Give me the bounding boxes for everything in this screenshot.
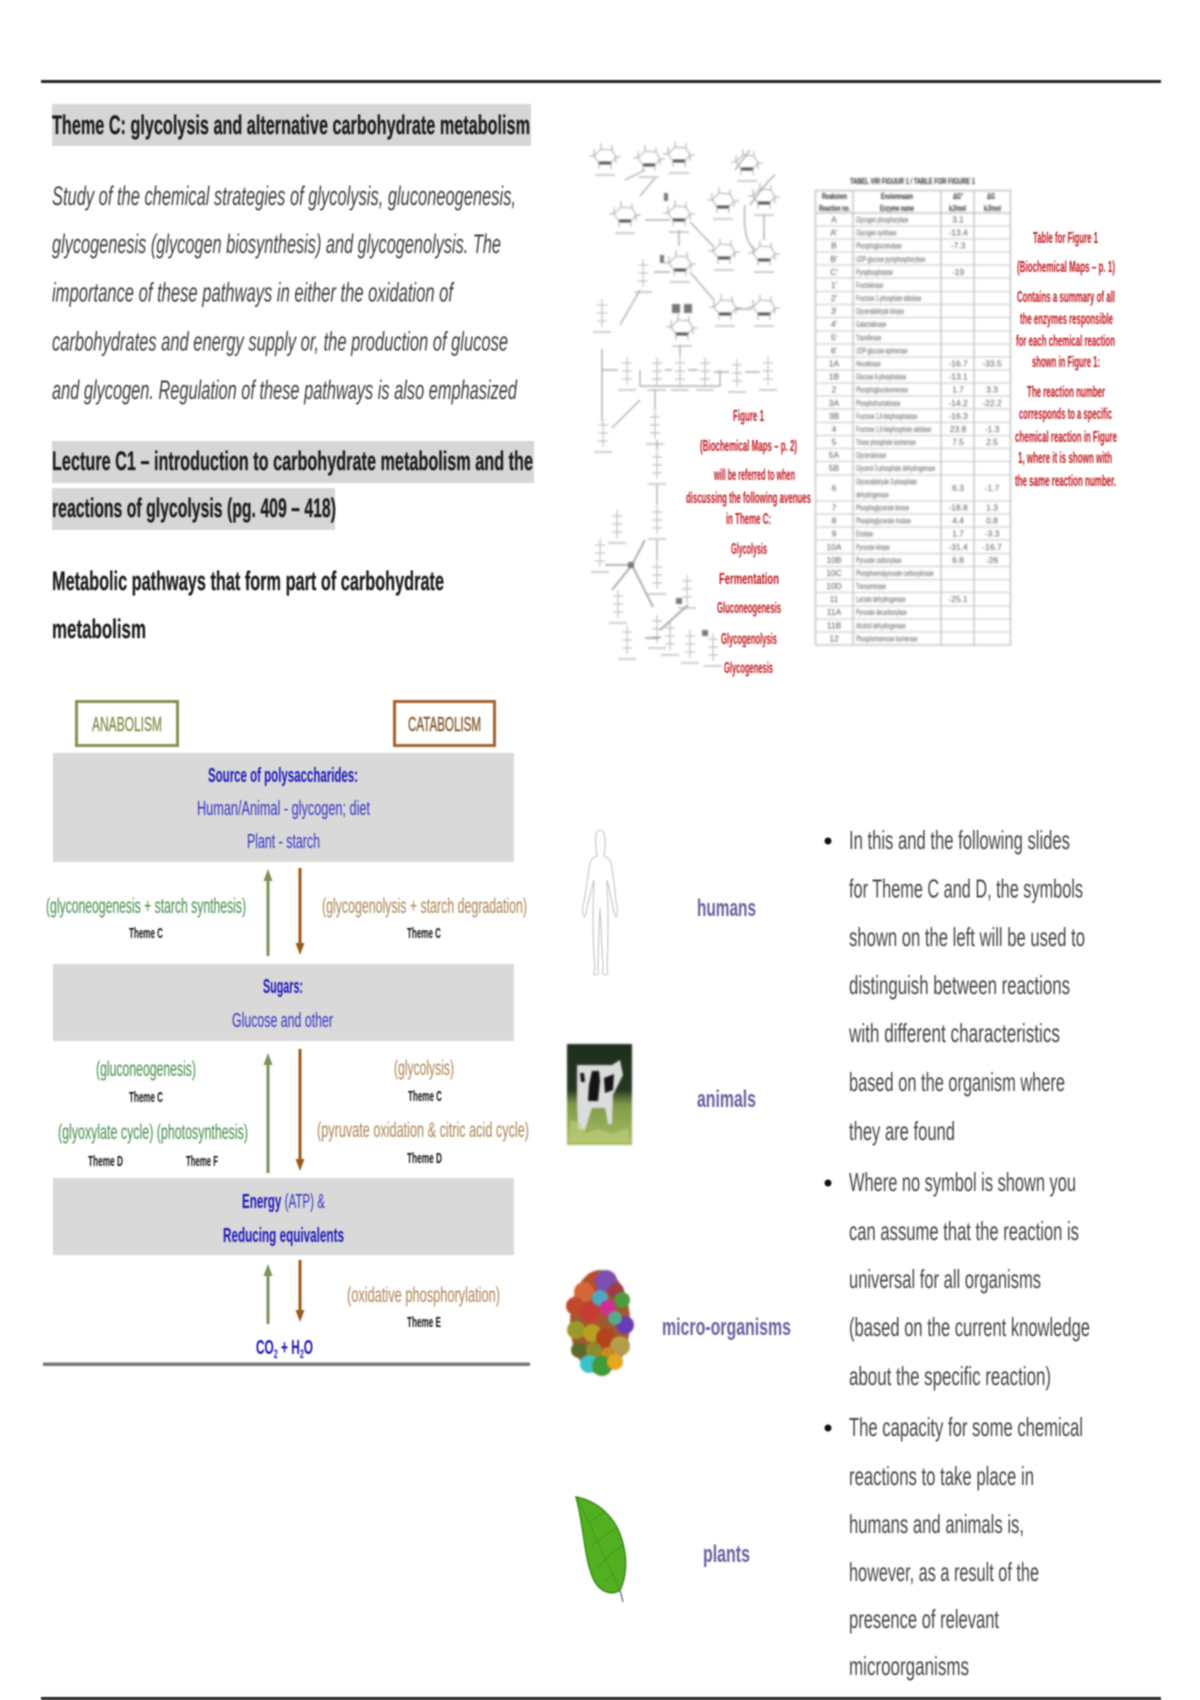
label: glyconeogenesis: Theme C (129, 925, 163, 942)
panel: energy: Energy (ATP) & (242, 1191, 325, 1213)
table energy values: 2.5 (986, 437, 998, 447)
table energy values: 0.8 (986, 516, 998, 526)
table header: ΔG (987, 192, 995, 201)
label: pyruvate oxidation: (pyruvate oxidation & citric acid cycle) (317, 1119, 529, 1142)
callout: figure 1 note: discussing the following avenues (686, 490, 811, 507)
table energy values: -19 (952, 267, 964, 277)
callout: table note: Table for Figure 1 (1033, 230, 1098, 247)
table enzyme names: UDP-glucose epimerase (856, 347, 908, 356)
table energy values: 6.8 (952, 555, 964, 565)
text block: theme description: importance of these pathways in either the oxidation of (52, 278, 455, 308)
label: glycolysis (394, 1057, 454, 1105)
table reaction numbers: 5' (831, 332, 838, 342)
table: enzymes for figure 1: TABEL VIR FIGUUR 1 / TABLE FOR FIGURE 1 (850, 177, 975, 186)
heading: Lecture C1: reactions of glycolysis (pg. 409 – 418) (52, 493, 336, 523)
label: glycolysis: Theme C (408, 1088, 442, 1105)
icon: micro-organisms (566, 1270, 634, 1376)
table enzyme names: Lactate dehydrogenase (856, 596, 906, 605)
table header: Ensiemnaam (881, 192, 913, 201)
table reaction numbers: 2 (832, 385, 837, 395)
table energy values: -1.3 (985, 424, 1000, 434)
label: glycogenolysis (322, 895, 527, 942)
panel: sugars (53, 964, 514, 1041)
figure: metabolic map (589, 141, 780, 666)
arrow: catabolic down 2 (296, 1049, 304, 1171)
table energy values: -13.4 (948, 228, 968, 238)
table energy values: -14.2 (948, 398, 968, 408)
table enzyme names: Pyrophosphatase (856, 269, 893, 277)
table header: kJ/mol (949, 204, 966, 213)
table reaction numbers: A' (830, 228, 838, 238)
table enzyme names: Enolase (856, 531, 873, 539)
callout: figure 1 note: Figure 1 (733, 408, 764, 425)
table reaction numbers: 1B (829, 372, 840, 382)
table reaction numbers: 3B (829, 411, 840, 421)
table reaction numbers: 11A (827, 607, 842, 617)
arrow: anabolic up 1 (264, 869, 272, 956)
table enzyme names: Pyruvate kinase (856, 544, 890, 552)
label: catabolism (394, 702, 494, 746)
table reaction numbers: 6' (831, 345, 838, 355)
heading: metabolic pathways: metabolism (52, 614, 146, 644)
callout: figure 1 note (686, 408, 811, 677)
bullet 2 (824, 1167, 1090, 1391)
table energy values: -16.3 (948, 411, 968, 421)
arrow: anabolic up 3 (264, 1264, 272, 1324)
callout: table note: The reaction number (1027, 384, 1105, 401)
bottom rule (41, 1697, 1161, 1700)
label: oxidative phosphorylation (347, 1284, 500, 1331)
table reaction numbers: 5B (829, 463, 840, 473)
text block: theme description: glycogenesis (glycogen biosynthesis) and glycogenolysis. The (52, 229, 501, 259)
rule under diagram (43, 1362, 530, 1366)
table reaction numbers: 5A (829, 450, 840, 460)
table reaction numbers: 6 (832, 483, 837, 493)
table energy values: 6.3 (952, 483, 964, 493)
heading: metabolic pathways: Metabolic pathways that form part of carbohydrate (52, 566, 444, 596)
callout: figure 1 note: in Theme C: (726, 511, 771, 528)
table reaction numbers: 12 (829, 633, 839, 643)
table energy values: -26 (986, 555, 998, 565)
label: end products: + H (278, 1337, 300, 1359)
table reaction numbers: 9 (832, 529, 837, 539)
label: glyoxylate and photosynthesis: (glyoxylate cycle) (photosynthesis) (58, 1121, 248, 1144)
label: gluconeogenesis: (gluconeogenesis) (96, 1058, 196, 1081)
bullet 1: In this and the following slides (849, 825, 1070, 855)
table reaction numbers: 3' (831, 306, 838, 316)
label: humans: humans (697, 895, 756, 922)
label: glyoxylate and photosynthesis: Theme F (186, 1153, 218, 1170)
text block: theme description: Study of the chemical strategies of glycolysis, gluconeogenesis, (52, 181, 516, 211)
label: glycogenolysis: Theme C (407, 925, 441, 942)
table enzyme names (856, 216, 935, 644)
heading: Lecture C1 (52, 441, 534, 530)
panel: polysaccharides: Source of polysaccharides: (208, 765, 358, 787)
table energy values: -18.8 (948, 502, 968, 512)
table reaction numbers: 10B (826, 555, 842, 565)
table energy values: -7.3 (951, 241, 966, 251)
text block: theme description: and glycogen. Regulation of these pathways is also emphasized (52, 375, 518, 405)
label: catabolism: CATABOLISM (408, 714, 481, 736)
label: glycogenolysis: (glycogenolysis + starch degradation) (322, 895, 527, 918)
table enzyme names: Glycogen synthase (856, 229, 897, 238)
bullet 2: Where no symbol is shown you (849, 1167, 1076, 1197)
label: end products: 2 (300, 1347, 304, 1361)
bullet 3: presence of relevant (849, 1604, 999, 1634)
table enzyme names: Phosphoglucomutase (856, 243, 902, 251)
table reaction numbers: B' (830, 254, 838, 264)
table energy values: -3.3 (985, 529, 1000, 539)
table reaction numbers: 11B (827, 620, 842, 630)
table reaction numbers (826, 214, 842, 643)
table reaction numbers: 2' (831, 293, 838, 303)
table enzyme names: Fructose 1-phosphate aldolase (856, 295, 921, 303)
panel: energy (53, 1178, 514, 1255)
table enzyme names: Phosphoglucoisomerase (856, 387, 908, 395)
icon: human outline (583, 830, 617, 975)
bullet 1 (824, 825, 1085, 1146)
bullet 1: based on the organism where (849, 1067, 1065, 1097)
table header: Reaction no. (819, 204, 850, 213)
table header: kJ/mol (984, 204, 1001, 213)
table enzyme names: Transaminase (856, 583, 886, 591)
panel: energy: Reducing equivalents (223, 1225, 344, 1247)
table energy values: -16.7 (948, 358, 968, 368)
label: glyconeogenesis (46, 895, 246, 942)
table enzyme names: Pyruvate carboxylase (856, 557, 902, 565)
bullet 1: they are found (849, 1116, 955, 1146)
label: gluconeogenesis (96, 1058, 196, 1106)
label: anabolism (76, 702, 178, 746)
label: glycolysis: (glycolysis) (394, 1057, 454, 1080)
table energy values: 23.8 (950, 424, 967, 434)
panel: polysaccharides: Human/Animal - glycogen; diet (197, 798, 370, 820)
callout: figure 1 note: (Biochemical Maps – p. 2) (700, 438, 797, 455)
table reaction numbers: 11 (830, 594, 839, 604)
table enzyme names: Pyruvate decarboxylase (856, 609, 907, 618)
label: oxidative phosphorylation: Theme E (407, 1314, 441, 1331)
table reaction numbers: 4' (831, 319, 838, 329)
label: oxidative phosphorylation: (oxidative phosphorylation) (347, 1284, 500, 1307)
table enzyme names: Alcohol dehydrogenase (856, 622, 906, 631)
table: enzymes for figure 1 (815, 177, 1011, 645)
panel: polysaccharides: Plant - starch (247, 831, 320, 853)
bullet 2: can assume that the reaction is (849, 1216, 1079, 1246)
arrow: catabolic down 3 (296, 1260, 304, 1322)
table energy values: 3.1 (952, 214, 964, 224)
bullet 3: microorganisms (849, 1651, 969, 1681)
label: gluconeogenesis: Theme C (129, 1089, 163, 1106)
table enzyme names: Phosphofructokinase (856, 400, 900, 408)
title: Theme C heading: Theme C: glycolysis and alternative carbohydrate metabolism (52, 110, 530, 140)
label: pyruvate oxidation: Theme D (407, 1150, 442, 1167)
table enzyme names: Glycerol 3-phosphate dehydrogenase (856, 465, 935, 474)
table reaction numbers: 7 (832, 502, 837, 512)
label: glyconeogenesis: (glyconeogenesis + starch synthesis) (46, 895, 246, 918)
table enzyme names: Phosphoglycerate mutase (856, 517, 911, 526)
table enzyme names: Glyceraldehyde 3-phosphate (856, 478, 917, 487)
table reaction numbers: 10A (826, 542, 842, 552)
label: glyoxylate and photosynthesis (58, 1121, 248, 1170)
top rule (41, 80, 1161, 83)
heading: metabolic pathways (52, 566, 444, 644)
table enzyme names: Hexokinase (856, 360, 881, 369)
table reaction numbers: B (831, 241, 837, 251)
diagram: carbohydrate metabolism overview (43, 702, 530, 1366)
callout: table note: 1, where it is shown with (1018, 450, 1112, 467)
table enzyme names: Galactokinase (856, 321, 886, 330)
label: anabolism: ANABOLISM (92, 714, 162, 736)
label: end products: 2 (274, 1347, 278, 1361)
table enzyme names: Fructose 1,6-bisphosphatase (856, 413, 917, 421)
table energy values: -13.1 (948, 372, 968, 382)
table header: ΔG° (953, 192, 963, 201)
table reaction numbers: 8 (832, 516, 837, 526)
table enzyme names: UDP-glucose pyrophosphorylase (856, 256, 926, 264)
label: end products: CO (256, 1337, 286, 1359)
callout: figure 1 note: Glycolysis (731, 541, 767, 558)
heading: Lecture C1: Lecture C1 – introduction to carbohydrate metabolism and the (52, 446, 533, 476)
table energy values: 1.7 (952, 385, 964, 395)
panel: polysaccharides (53, 753, 514, 862)
panel: sugars: Sugars: (263, 976, 303, 998)
table enzyme names: Glyceraldehyde kinase (856, 308, 904, 317)
table enzyme names: Phosphoenolpyruvate carboxykinase (856, 570, 934, 578)
bullet 2: about the specific reaction) (849, 1361, 1051, 1391)
panel: sugars: Glucose and other (232, 1010, 333, 1032)
table energy values: 7.5 (952, 437, 964, 447)
bullet 1: distinguish between reactions (849, 970, 1070, 1000)
arrow: anabolic up 2 (264, 1053, 272, 1173)
table enzyme names: Triose phosphate isomerase (856, 439, 916, 447)
callout: figure 1 note: Fermentation (719, 571, 779, 588)
title: Theme C heading (52, 104, 531, 146)
label: animals: animals (697, 1086, 756, 1113)
callout: figure 1 note: will be referred to when (714, 467, 795, 484)
table energy values: -25.1 (948, 594, 968, 604)
icon: cow photo (567, 1044, 632, 1145)
table reaction numbers: 3A (829, 398, 840, 408)
table reaction numbers: 10D (826, 581, 842, 591)
table enzyme names: Fructokinase (856, 282, 883, 290)
table enzyme names: Phosphoglycerate kinase (856, 504, 909, 513)
table reaction numbers: 4 (832, 424, 837, 434)
icon: leaf (576, 1497, 626, 1602)
table energy values: -22.2 (982, 398, 1002, 408)
bullet 3: however, as a result of the (849, 1557, 1039, 1587)
table header: Enzyme name (880, 204, 914, 213)
table reaction numbers: 10C (826, 568, 842, 578)
label: plants: plants (703, 1541, 750, 1568)
bullet 2: universal for all organisms (849, 1264, 1041, 1294)
bullet 3 (824, 1412, 1083, 1681)
label: micro-organisms: micro-organisms (662, 1314, 791, 1341)
table enzyme names: Glucose 6-phosphatase (856, 373, 906, 382)
arrow: catabolic down 1 (296, 868, 304, 955)
text block: theme description (52, 181, 518, 405)
table energy values: 4.4 (952, 516, 964, 526)
table energy values: -33.5 (982, 358, 1002, 368)
table energy values: -1.7 (985, 483, 1000, 493)
table enzyme names: Glycerokinase (856, 452, 886, 461)
label: glyoxylate and photosynthesis: Theme D (88, 1153, 123, 1170)
table enzyme names: Phosphomannose isomerase (856, 635, 918, 644)
table enzyme names: Glycogen phosphorylase (856, 216, 908, 225)
table energy values: 1.7 (952, 529, 964, 539)
label: pyruvate oxidation (317, 1119, 529, 1167)
table reaction numbers: A (831, 214, 837, 224)
callout: figure 1 note: Glycogenolysis (721, 631, 777, 648)
table reaction numbers: 5 (832, 437, 837, 447)
table reaction numbers: C' (830, 267, 838, 277)
table header (819, 192, 1001, 213)
table energy values (948, 214, 1002, 604)
table reaction numbers: 1' (831, 280, 838, 290)
bullet 3: humans and animals is, (849, 1509, 1024, 1539)
table enzyme names: dehydrogenase (856, 491, 889, 500)
text block: bullet list (824, 825, 1090, 1681)
callout: table note: shown in Figure 1: (1032, 354, 1100, 371)
bullet 3: reactions to take place in (849, 1461, 1034, 1491)
table energy values: 3.3 (986, 385, 998, 395)
table header: Reaksiem (822, 192, 847, 201)
table enzyme names: Fructose 1,6-bisphosphate aldolase (856, 426, 931, 434)
table reaction numbers: 1A (829, 358, 840, 368)
table enzyme names: Transferase (856, 334, 881, 343)
callout: figure 1 note: Glycogenesis (724, 660, 773, 677)
callout: figure 1 note: Gluconeogenesis (717, 600, 781, 617)
label: end products: O (304, 1337, 313, 1359)
bullet 1: with different characteristics (848, 1018, 1060, 1048)
callout: table note: the enzymes responsible (1020, 311, 1113, 328)
callout: table note (1015, 230, 1117, 490)
table energy values: -31.4 (948, 542, 968, 552)
table energy values: 1.3 (986, 502, 998, 512)
text block: theme description: carbohydrates and energy supply or, the production of glucose (52, 326, 508, 356)
table energy values: -16.7 (982, 542, 1002, 552)
